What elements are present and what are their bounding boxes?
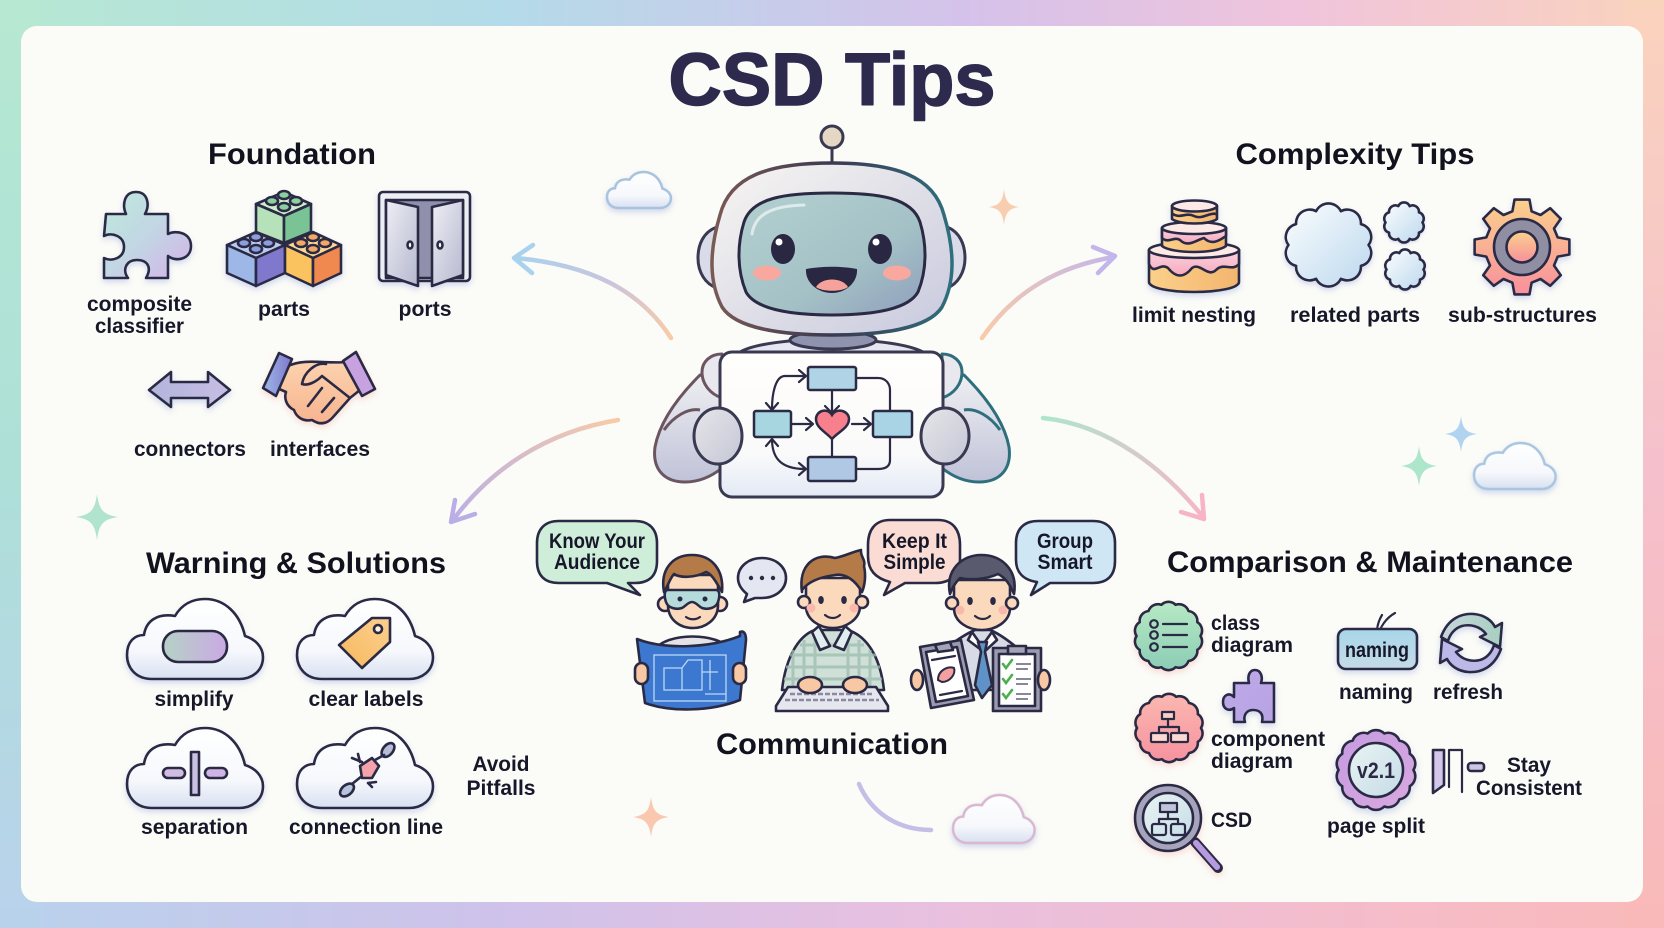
label: naming: naming: [1339, 681, 1413, 704]
robot head: [712, 163, 952, 335]
speech bubble: group smart: [1016, 521, 1115, 595]
item: sub-structures: [1448, 200, 1597, 327]
decorative sparkles: [76, 189, 1477, 837]
label: sub-structures: sub-structures: [1448, 304, 1597, 327]
panel: foundation: [87, 138, 470, 461]
label: simplify: simplify: [154, 688, 234, 711]
robot right arm: [940, 354, 1009, 482]
icon: cloud with pill: [127, 599, 263, 679]
label: clear labels: clear labels: [308, 688, 424, 711]
icon: small cloud blob top: [1384, 202, 1424, 243]
label: limit nesting: limit nesting: [1132, 304, 1256, 327]
speech bubble: know your audience: Audience: [554, 551, 640, 574]
arrow: to warning and solutions: [451, 420, 618, 522]
icon: refresh arrows: [1440, 614, 1502, 672]
heading: communication: Communication: [716, 728, 948, 761]
icon: open double door: [379, 192, 470, 286]
item: naming: [1338, 613, 1417, 704]
hands: [635, 663, 746, 684]
speech bubble: keep it simple: [868, 520, 960, 595]
panel: central robot: [655, 126, 1009, 497]
item: interfaces: [263, 352, 375, 461]
item: component diagram: [1135, 670, 1325, 773]
robot fists: [694, 408, 969, 464]
keyboard: [776, 687, 888, 711]
label: refresh: refresh: [1433, 681, 1503, 704]
robot board with flow diagram: [720, 352, 943, 497]
person: blueprint reader with goggles: [635, 555, 746, 709]
item: page split: [1327, 730, 1425, 838]
icon: puzzle piece: [104, 192, 191, 278]
arrow: decorative curve to cloud: [859, 784, 931, 830]
label: avoid pitfalls: Avoid: [472, 753, 530, 776]
title: CSD Tips: [668, 38, 996, 121]
speech bubble: keep it simple: Keep It: [882, 530, 947, 553]
label: parts: parts: [258, 298, 310, 321]
icon: small cloud blob bottom: [1385, 249, 1425, 290]
speech bubble: group smart: Group: [1037, 530, 1093, 553]
label: stay consistent: Stay: [1507, 754, 1551, 777]
label: related parts: related parts: [1290, 304, 1420, 327]
item: stay consistent: [1433, 750, 1582, 800]
item: connection line: [289, 728, 443, 839]
label: separation: separation: [141, 816, 248, 839]
right clipboard: [993, 646, 1041, 711]
icon: cloud with tag: [297, 599, 433, 679]
robot neck: [790, 331, 876, 349]
heading: warning and solutions: Warning & Solutions: [146, 547, 446, 580]
left clipboard: [920, 640, 974, 708]
robot shoulders: [740, 339, 923, 352]
label: csd: CSD: [1211, 809, 1252, 832]
icon: gear: [1475, 200, 1569, 294]
label: page split: page split: [1327, 815, 1425, 838]
robot screen: [739, 193, 925, 315]
blueprint sheet: [637, 632, 746, 709]
item: related parts: [1286, 202, 1425, 327]
icon: handshake: [263, 352, 375, 423]
icon: version badge: v2.1: [1357, 758, 1395, 783]
heading: complexity tips: Complexity Tips: [1236, 138, 1474, 171]
heading: comparison and maintenance: Comparison & Maintenance: [1167, 546, 1573, 579]
panel: warning and solutions: [127, 547, 536, 839]
robot ears: [698, 227, 965, 288]
icon: split page: [1433, 750, 1484, 793]
arrow: to complexity tips: [982, 247, 1115, 338]
panel: comparison and maintenance: [1135, 546, 1582, 868]
speech bubble: group smart: Smart: [1038, 551, 1092, 574]
heading: foundation: Foundation: [208, 138, 376, 171]
item: class diagram: [1135, 602, 1293, 670]
icon: three tier cake: [1149, 200, 1239, 292]
label: class diagram: diagram: [1211, 634, 1293, 657]
icon: double-headed arrow: [149, 372, 230, 407]
robot antenna: [821, 126, 843, 165]
label: connectors: connectors: [134, 438, 246, 461]
label: class diagram: class: [1211, 612, 1260, 635]
robot face: [752, 205, 911, 293]
item: parts: [227, 191, 341, 321]
label: component diagram: diagram: [1211, 750, 1293, 773]
label: avoid pitfalls: Pitfalls: [466, 777, 536, 800]
panel: complexity tips: [1132, 138, 1597, 327]
item: connectors: [134, 372, 246, 461]
item: clear labels: [297, 599, 433, 711]
icon: building blocks: [227, 191, 341, 286]
icon: green badge with list: [1135, 602, 1202, 670]
arrow: to comparison and maintenance: [1043, 418, 1204, 519]
label: composite classifier: composite: [87, 293, 192, 316]
icon: name tag: naming: [1345, 639, 1409, 662]
speech bubble: keep it simple: Simple: [884, 551, 946, 574]
label: stay consistent: Consistent: [1476, 777, 1582, 800]
item: simplify: [127, 599, 263, 711]
panel: communication: [537, 520, 1115, 761]
icon: large cloud blob: [1286, 203, 1371, 287]
item: refresh: [1433, 614, 1503, 704]
item: limit nesting: [1132, 200, 1256, 327]
arrow: to foundation: [514, 245, 671, 338]
speech bubble: ellipsis: [738, 558, 786, 602]
label: connection line: connection line: [289, 816, 443, 839]
icon: cloud with divider: [127, 728, 263, 808]
label: interfaces: interfaces: [270, 438, 370, 461]
icon: cloud with broken connection: [297, 728, 433, 808]
flow diagram connectors: [766, 370, 890, 475]
item: ports: [379, 192, 470, 321]
robot left arm: [655, 354, 724, 482]
item: composite classifier: [87, 192, 192, 338]
flow diagram boxes: [754, 367, 912, 481]
person: typing developer: [776, 550, 888, 711]
label: component diagram: component: [1211, 728, 1325, 751]
item: separation: [127, 728, 263, 839]
decorative clouds: [607, 172, 1556, 843]
speech bubble: know your audience: Know Your: [549, 530, 645, 553]
speech bubble: know your audience: [537, 521, 657, 595]
item: csd: [1135, 785, 1252, 868]
icon: purple puzzle piece: [1223, 670, 1274, 722]
label: composite classifier: classifier: [95, 315, 184, 338]
icon: pink badge with tree: [1135, 694, 1203, 762]
icon: magnifier over tree: [1135, 785, 1218, 868]
person: reviewer with clipboards: [911, 555, 1050, 711]
label: ports: ports: [398, 298, 452, 321]
